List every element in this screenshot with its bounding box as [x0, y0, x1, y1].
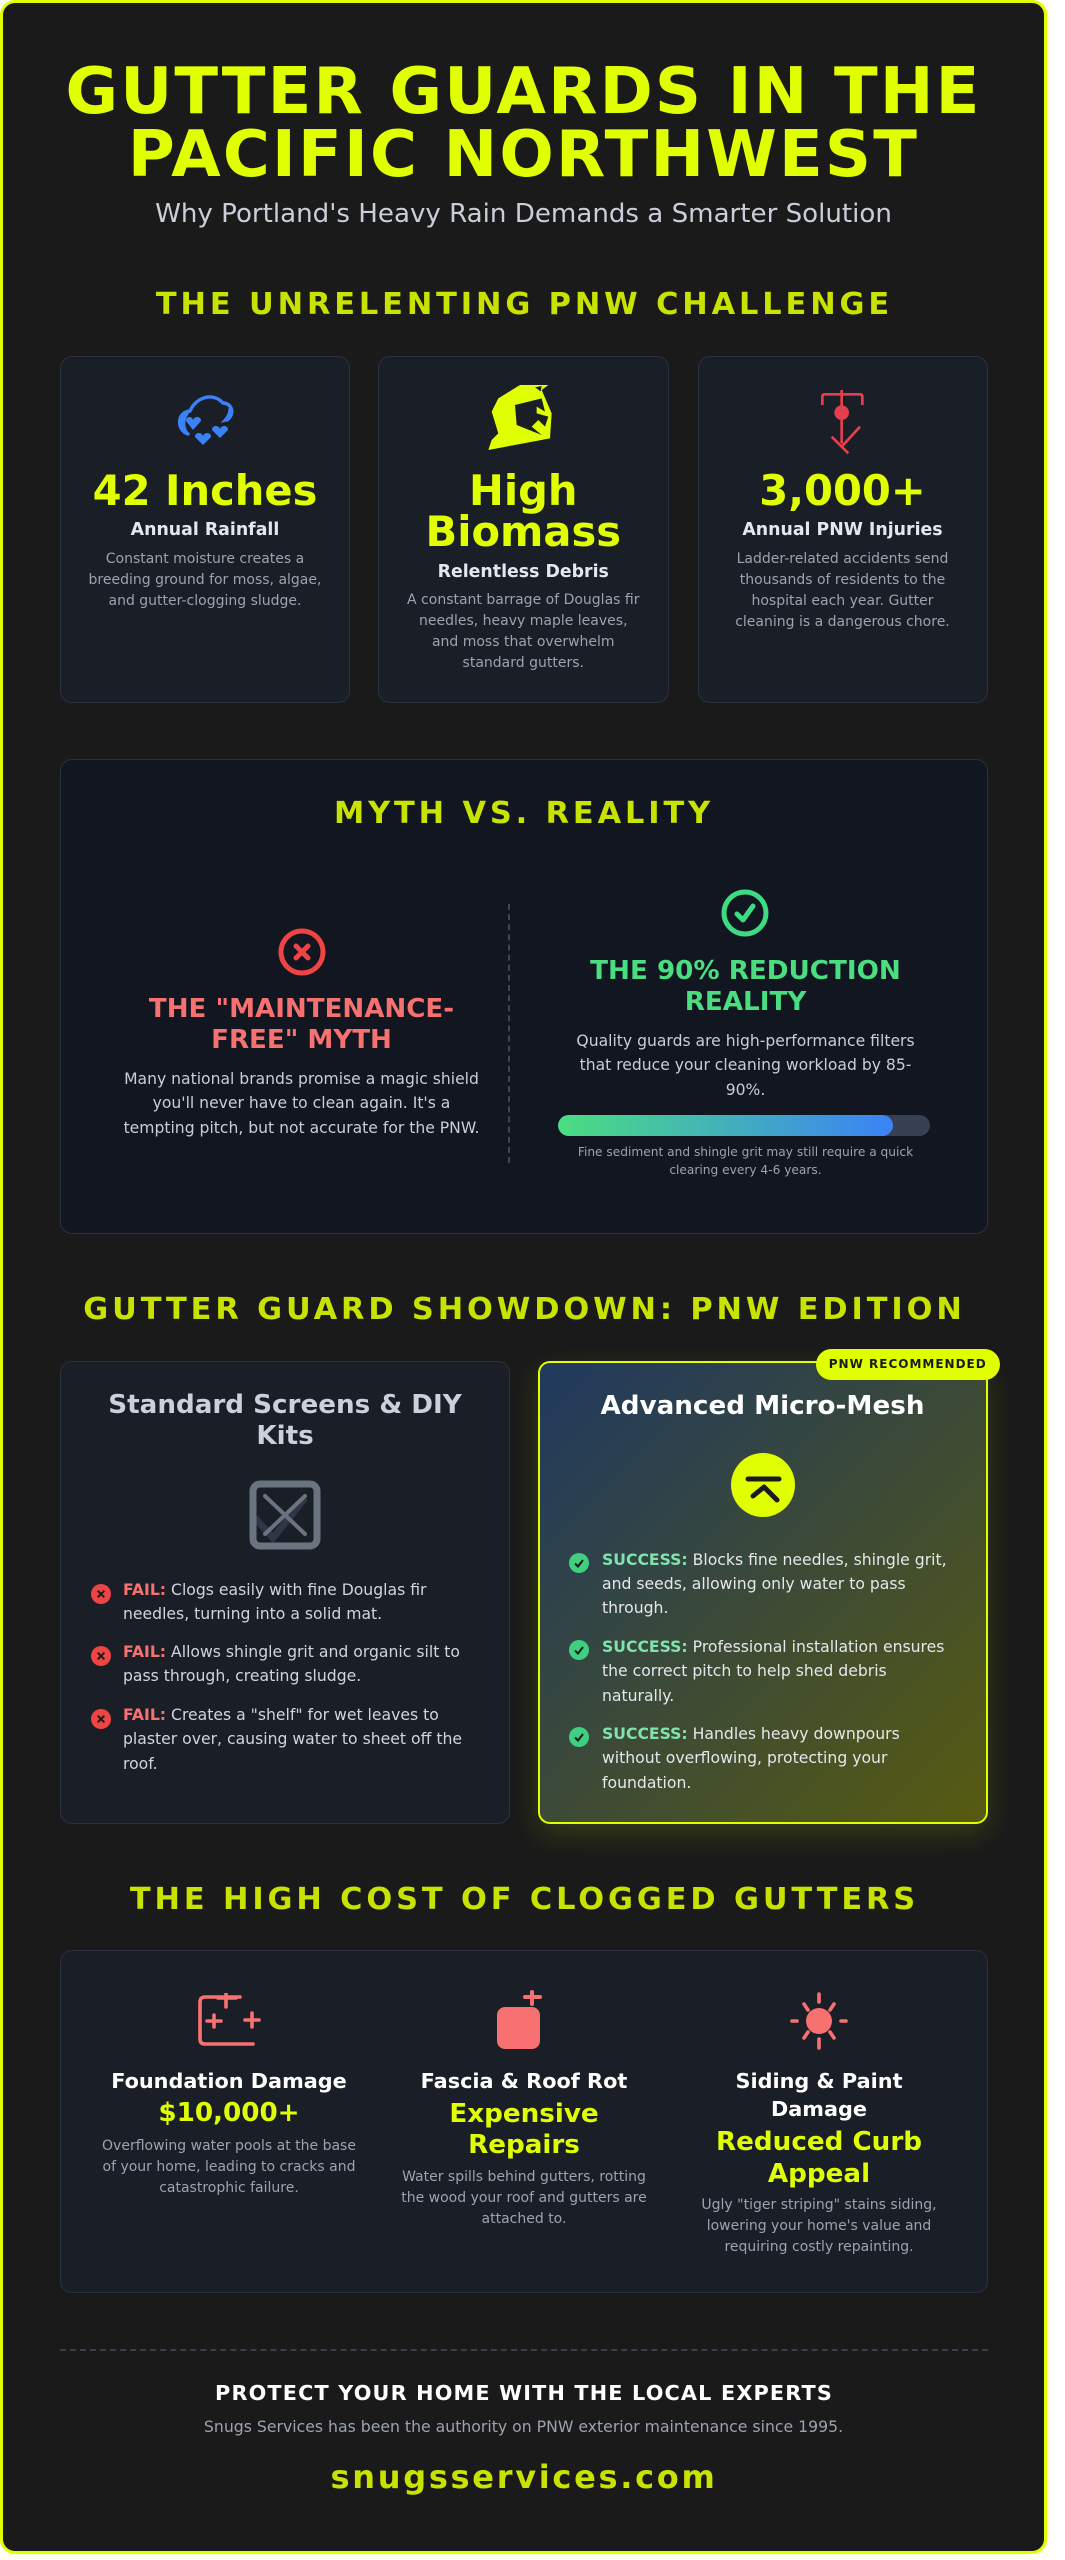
footer divider: [60, 2349, 988, 2351]
description: of your home, leading to cracks and: [103, 2159, 355, 2175]
reality heading: REALITY: [685, 987, 806, 1017]
reality text: that reduce your cleaning workload by 85-: [580, 1056, 911, 1074]
description: Overflowing water pools at the base: [102, 2138, 356, 2154]
myth column: [124, 928, 479, 1137]
text: FAIL: Allows shingle grit and organic silt to: [123, 1642, 460, 1661]
column: foundation: [102, 1993, 356, 2196]
text: [123, 1642, 460, 1685]
description: Ugly "tiger striping" stains siding,: [701, 2197, 937, 2213]
description: and gutter-clogging sludge.: [108, 593, 301, 609]
icon: foundation cracks: [198, 1993, 261, 2046]
icon: debris: [488, 385, 552, 450]
note: clearing every 4-6 years.: [669, 1163, 822, 1177]
fail item 2: [91, 1642, 460, 1685]
label: Annual Rainfall: [131, 520, 279, 540]
footer: [60, 2349, 988, 2499]
panel title: Standard Screens & DIY: [108, 1390, 462, 1420]
text: SUCCESS: Professional installation ensures: [602, 1637, 944, 1656]
value: Repairs: [468, 2130, 580, 2160]
text: [602, 1637, 944, 1705]
title: GUTTER GUARDS IN THE: [66, 55, 982, 129]
panel: myth vs reality: [60, 759, 988, 1234]
text: SUCCESS: Blocks fine needles, shingle grit,: [602, 1550, 947, 1568]
panel title: [108, 1390, 462, 1451]
reality column: [558, 890, 930, 1177]
stat: [426, 466, 621, 556]
description: attached to.: [482, 2211, 566, 2227]
myth text: Many national brands promise a magic shield: [124, 1070, 479, 1088]
text: through.: [602, 1598, 668, 1617]
description: [407, 592, 640, 671]
description: standard gutters.: [463, 655, 584, 671]
description: [735, 551, 950, 630]
stat: High: [469, 466, 577, 514]
value: [659, 2127, 979, 2190]
description: hospital each year. Gutter: [751, 593, 934, 609]
description: needles, heavy maple leaves,: [419, 613, 628, 629]
section heading: challenge: THE UNRELENTING PNW CHALLENGE: [156, 286, 893, 322]
section heading: showdown: GUTTER GUARD SHOWDOWN: PNW EDITION: [83, 1292, 966, 1326]
description: and moss that overwhelm: [432, 634, 615, 650]
description: A constant barrage of Douglas fir: [407, 592, 639, 608]
myth text: [124, 1070, 479, 1137]
description: Ladder-related accidents send: [737, 551, 948, 567]
icon: micro-mesh: [731, 1453, 795, 1517]
reality text: Quality guards are high-performance filters: [576, 1032, 915, 1050]
title: Foundation Damage: [111, 2068, 347, 2092]
icon: sun damage: [784, 1989, 854, 2051]
text: [602, 1550, 947, 1617]
subtitle: Why Portland's Heavy Rain Demands a Smarter Solution: [155, 199, 892, 229]
panel: 42 inches: [60, 356, 350, 703]
label: Annual PNW Injuries: [742, 520, 943, 540]
column: fascia: [364, 1981, 684, 2261]
title: [66, 55, 982, 192]
website: snugsservices.com: [330, 2458, 718, 2496]
description: [364, 2167, 684, 2230]
badge: [816, 1349, 1000, 1380]
icon: success: [569, 1640, 589, 1660]
icon: rain cloud: [178, 395, 234, 445]
myth heading: FREE" MYTH: [211, 1025, 392, 1055]
description: Constant moisture creates a: [106, 551, 304, 567]
text: naturally.: [602, 1686, 674, 1705]
value: [364, 2098, 684, 2162]
text: [123, 1705, 462, 1773]
fail item 3: [91, 1705, 462, 1773]
icon: blocked screen: [250, 1480, 320, 1550]
panel: standard screens: [60, 1361, 510, 1824]
label: Relentless Debris: [438, 562, 609, 582]
panel title: Kits: [256, 1421, 314, 1451]
column: siding: [659, 1981, 979, 2271]
footer text: Snugs Services has been the authority on PNW exterior maintenance since 1995.: [204, 2417, 843, 2436]
badge: PNW RECOMMENDED: [829, 1357, 987, 1371]
stat: 3,000+: [759, 466, 926, 514]
value: Reduced Curb: [716, 2127, 922, 2157]
stat: Biomass: [426, 507, 621, 556]
reality text: [576, 1032, 915, 1099]
icon: success: [569, 1553, 589, 1573]
myth text: you'll never have to clean again. It's a: [153, 1094, 450, 1112]
text: FAIL: Creates a "shelf" for wet leaves to: [123, 1705, 439, 1724]
panel: high biomass: [378, 356, 668, 703]
text: foundation.: [602, 1773, 691, 1792]
value: $10,000+: [158, 2098, 300, 2128]
footer heading: PROTECT YOUR HOME WITH THE LOCAL EXPERTS: [215, 2381, 833, 2405]
fail item 1: [91, 1580, 426, 1623]
progress bar: [558, 1115, 930, 1136]
panel: cost of clogged gutters: [60, 1950, 988, 2293]
reality text: 90%.: [726, 1081, 765, 1099]
text: [123, 1580, 426, 1623]
icon: rotted wood: [483, 1989, 553, 2051]
divider: [508, 904, 510, 1163]
value: Expensive: [449, 2098, 599, 2128]
text: pass through, creating sludge.: [123, 1666, 361, 1685]
description: lowering your home's value and: [707, 2218, 931, 2234]
panel title: Advanced Micro-Mesh: [601, 1391, 924, 1421]
value: Appeal: [768, 2158, 870, 2188]
text: roof.: [123, 1754, 158, 1773]
description: thousands of residents to the: [740, 572, 945, 588]
description: Water spills behind gutters, rotting: [402, 2169, 646, 2185]
heading: MYTH VS. REALITY: [334, 796, 714, 830]
title: Siding & Paint: [735, 2068, 903, 2092]
myth heading: [149, 994, 454, 1055]
title: Damage: [771, 2096, 867, 2120]
text: plaster over, causing water to sheet off the: [123, 1729, 462, 1748]
icon: fail: [91, 1709, 111, 1729]
icon: fail: [91, 1646, 111, 1666]
text: FAIL: Clogs easily with fine Douglas fir: [123, 1580, 426, 1599]
text: the correct pitch to help shed debris: [602, 1661, 887, 1680]
description: catastrophic failure.: [159, 2180, 299, 2196]
note: Fine sediment and shingle grit may still require a quick: [578, 1145, 913, 1159]
myth heading: THE "MAINTENANCE-: [149, 994, 454, 1024]
title: PACIFIC NORTHWEST: [128, 118, 919, 192]
success item 1: [569, 1550, 947, 1617]
title: [659, 2066, 979, 2122]
section heading: cost: THE HIGH COST OF CLOGGED GUTTERS: [130, 1882, 919, 1916]
panel: injuries: [698, 356, 988, 703]
success item 2: [569, 1637, 944, 1705]
description: [659, 2195, 979, 2258]
description: the wood your roof and gutters are: [401, 2190, 647, 2206]
description: cleaning is a dangerous chore.: [735, 614, 950, 630]
text: without overflowing, protecting your: [602, 1748, 887, 1767]
description: [69, 2136, 389, 2199]
text: [602, 1724, 900, 1792]
panel: advanced micro-mesh: [538, 1361, 988, 1824]
icon: ladder fall: [821, 390, 864, 454]
icon: check circle: [722, 890, 768, 936]
myth text: tempting pitch, but not accurate for the PNW.: [124, 1119, 479, 1137]
description: [89, 551, 321, 609]
text: SUCCESS: Handles heavy downpours: [602, 1724, 900, 1743]
icon: fail: [91, 1584, 111, 1604]
note: [578, 1145, 913, 1177]
text: needles, turning into a solid mat.: [123, 1604, 382, 1623]
icon: cross circle: [278, 928, 326, 976]
success item 3: [569, 1724, 900, 1792]
reality heading: THE 90% REDUCTION: [590, 956, 901, 986]
title: Fascia & Roof Rot: [421, 2068, 627, 2092]
description: requiring costly repainting.: [724, 2239, 914, 2255]
stat: 42 Inches: [93, 466, 317, 514]
reality heading: [590, 956, 901, 1017]
icon: success: [569, 1727, 589, 1747]
text: and seeds, allowing only water to pass: [602, 1574, 906, 1593]
description: breeding ground for moss, algae,: [89, 572, 321, 588]
